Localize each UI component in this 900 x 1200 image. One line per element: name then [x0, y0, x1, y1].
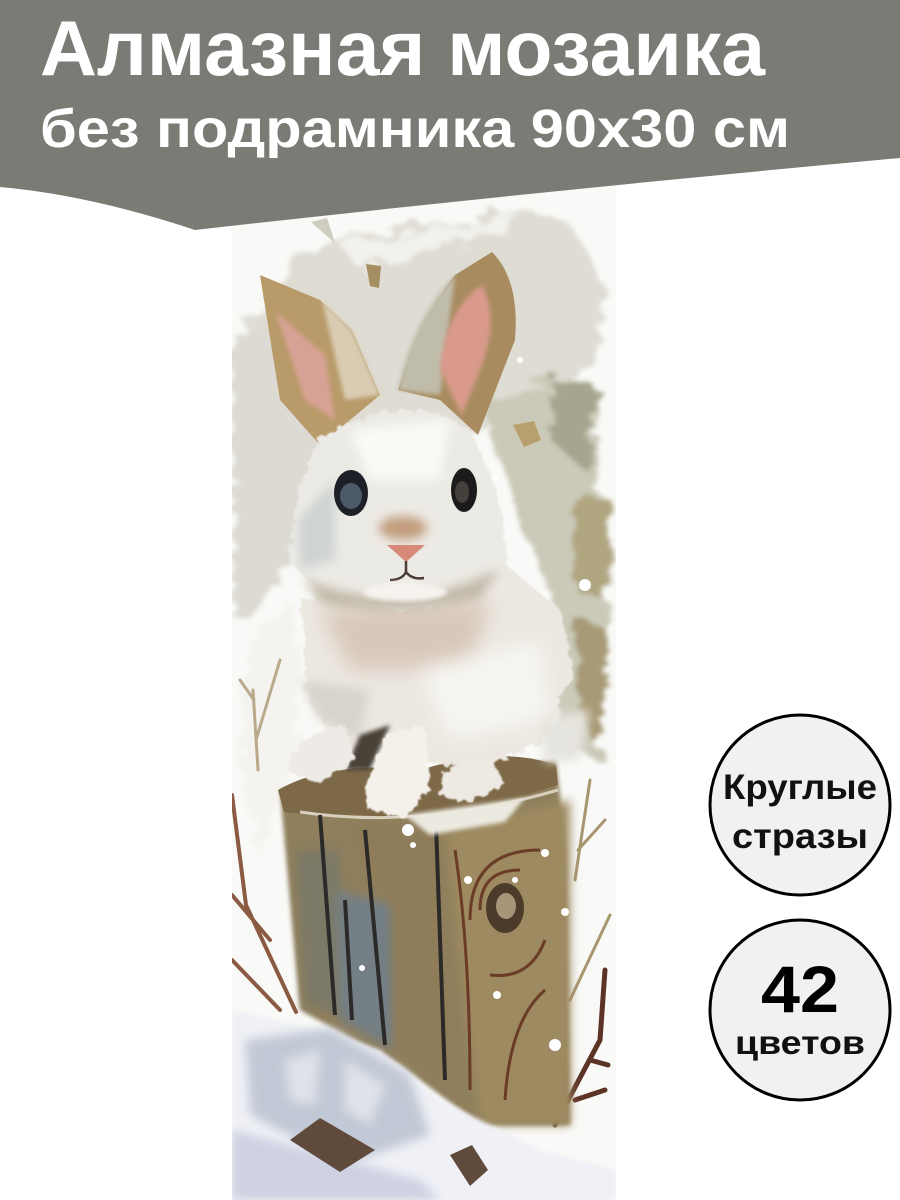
badge: round rhinestones: стразы [732, 817, 868, 856]
badge: 42 colours: цветов [735, 1024, 865, 1061]
paint flecks [311, 218, 541, 447]
nose and mouth [387, 545, 425, 562]
badge: round rhinestones: Круглые [723, 768, 877, 807]
snow mound and rocks [232, 1010, 616, 1200]
painting: white rabbit on a stump [232, 185, 616, 1200]
bare twigs [232, 660, 610, 1125]
eyes [334, 470, 368, 516]
badge: round rhinestones [710, 715, 890, 895]
rabbit ears [260, 252, 516, 445]
badge: 42 colours [710, 920, 890, 1100]
snowflakes [359, 357, 591, 1051]
title: Алмазная мозаика [40, 4, 766, 92]
tree stump [278, 756, 570, 1125]
badge: 42 colours: 42 [761, 952, 839, 1026]
rabbit head [290, 410, 508, 610]
header banner [0, 0, 900, 230]
rabbit body [285, 560, 590, 818]
subtitle: без подрамника 90х30 см [40, 99, 790, 159]
painted background strokes [232, 204, 616, 765]
